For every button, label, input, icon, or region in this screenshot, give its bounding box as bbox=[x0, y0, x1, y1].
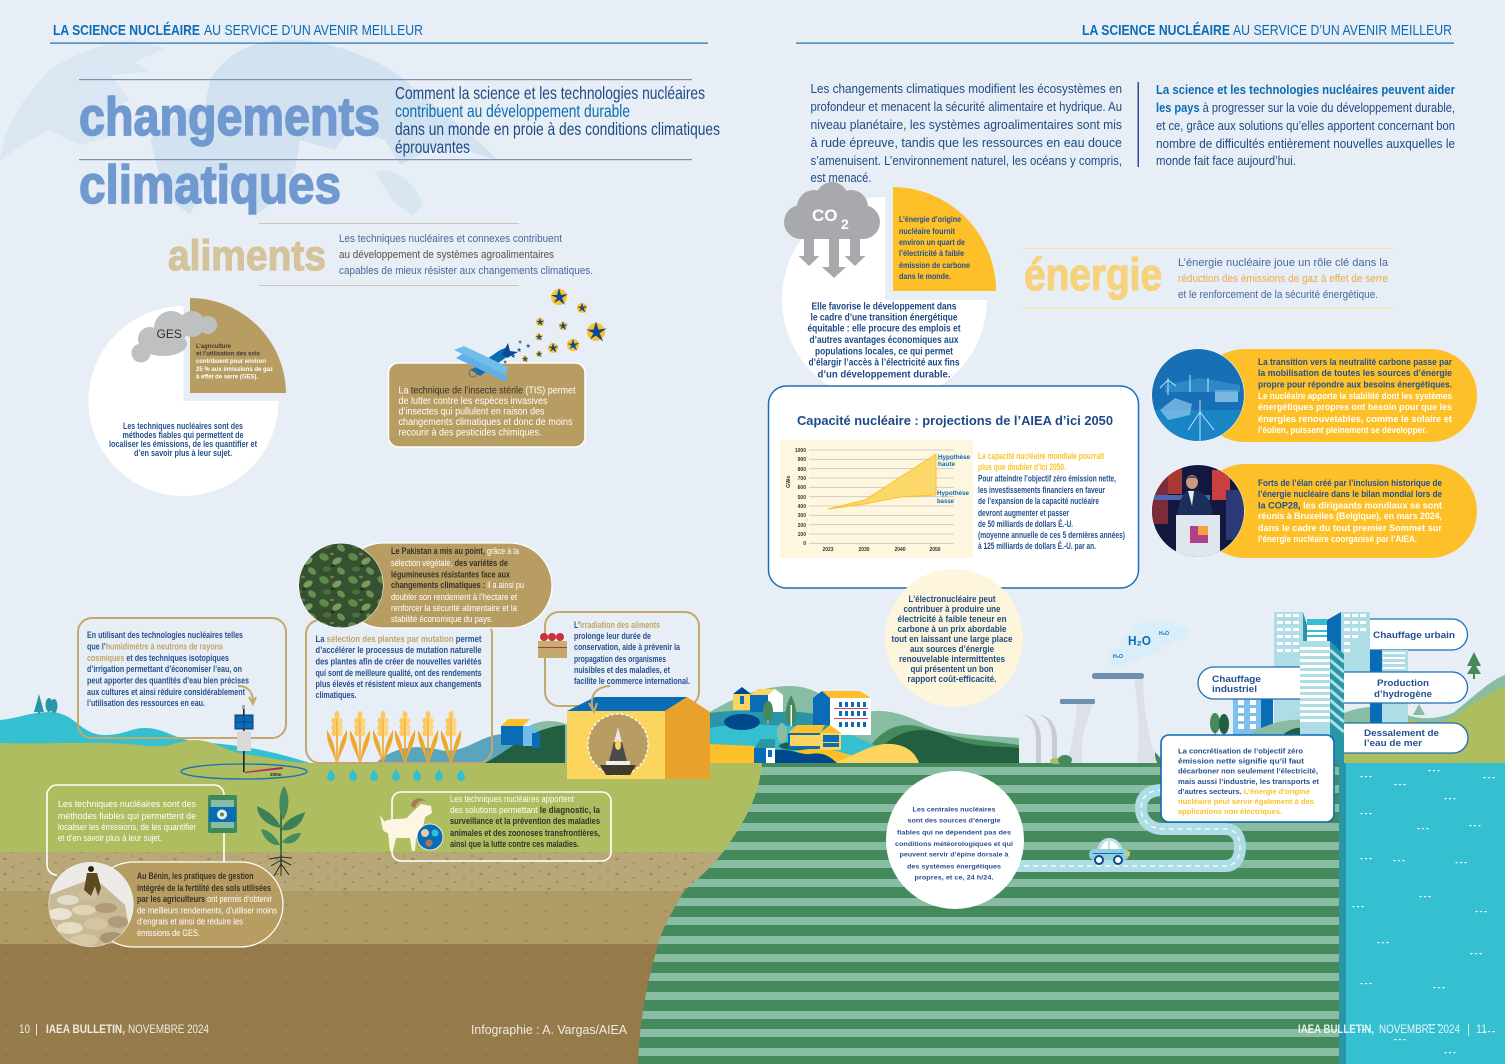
subtitle: contribuent au développement durable bbox=[395, 101, 630, 121]
panel: localiser les émissions bbox=[47, 785, 237, 875]
title: changements bbox=[79, 87, 380, 147]
icon: plant with roots bbox=[257, 786, 305, 876]
panel: localiser les émissions: Les techniques nucléaires sont des bbox=[58, 799, 196, 810]
callout: cream circle: électricité à faible teneur en bbox=[898, 614, 1007, 625]
icon: small teal-roofed house bbox=[754, 739, 775, 763]
callout: cream circle: L’électronucléaire peut bbox=[908, 594, 996, 605]
callout: cream circle: carbone à un prix abordable bbox=[898, 624, 1006, 635]
panel: CO2 pie: le cadre d’une transition énergétique bbox=[810, 312, 958, 324]
panel: Bénin: de meilleurs rendements, d’utiliser moins bbox=[137, 906, 277, 916]
icon: water vapour cloud: H₂O bbox=[1128, 634, 1151, 648]
icon: water drops bbox=[327, 769, 465, 781]
callout: cream circle: contribuer à produire une bbox=[904, 604, 1000, 615]
section heading: énergie: énergie bbox=[1024, 249, 1162, 300]
panel: GES pie: GES bbox=[156, 327, 182, 341]
panel: COP28 pill bbox=[1150, 464, 1477, 559]
label: Production d'hydrogène: d’hydrogène bbox=[1374, 689, 1432, 700]
panel: CO2 pie: Elle favorise le développement dans bbox=[812, 302, 957, 312]
panel: COP28 pill: dans le cadre du tout premier Sommet sur bbox=[1258, 523, 1442, 534]
panel: neutron humidity sensor text: aux cultures et ainsi réduire considérablement bbox=[87, 687, 246, 698]
icon: pine tree bbox=[1413, 652, 1481, 715]
panel: capacity chart card: les investissements financiers en faveur bbox=[978, 485, 1105, 495]
panel: GES pie: contribuent pour environ bbox=[196, 358, 266, 365]
footer right: 11 bbox=[1476, 1024, 1487, 1036]
panel: capacity chart card: plus que doubler d’ici 2050. bbox=[978, 462, 1066, 472]
panel: zoonoses: surveillance et la prévention des maladies bbox=[450, 816, 600, 827]
icon: large white building bbox=[813, 691, 871, 735]
icon: house blue white bbox=[750, 689, 783, 712]
title: climatiques bbox=[79, 155, 341, 215]
panel: food irradiation: facilite le commerce international. bbox=[574, 676, 690, 687]
icon: wheat bbox=[327, 711, 461, 763]
callout: cream circle bbox=[885, 569, 1023, 707]
page header left: AU SERVICE D’UN AVENIR MEILLEUR bbox=[204, 23, 423, 39]
panel: plant mutation: La sélection des plantes par mutation permet bbox=[316, 634, 482, 645]
page header left: LA SCIENCE NUCLÉAIRE bbox=[53, 22, 200, 39]
waves bbox=[1352, 770, 1495, 1054]
panel: Pakistan: changements climatiques : il a ainsi pu bbox=[391, 580, 524, 591]
callout: cream circle: aux sources d’énergie bbox=[910, 644, 994, 655]
line chart: 900 bbox=[798, 457, 806, 463]
line chart: 2050 bbox=[929, 547, 941, 553]
panel: capacity chart card: devront augmenter et passer bbox=[978, 508, 1069, 518]
panel: Bénin: d’engrais et ainsi de réduire les bbox=[137, 916, 243, 928]
line chart: 400 bbox=[798, 504, 806, 510]
panel: neutron humidity sensor text: cosmiques et des techniques isotopiques bbox=[87, 653, 229, 664]
panel: plant mutation bbox=[306, 620, 492, 763]
panel: net zero box: nucléaire peut servir également à des bbox=[1178, 799, 1314, 806]
line chart: 2040 bbox=[894, 547, 906, 553]
panel: neutralité carbone pill: énergies renouvelables, comme le solaire et bbox=[1258, 414, 1453, 425]
line chart: 300 bbox=[798, 513, 806, 519]
subtitle: dans un monde en proie à des conditions climatiques bbox=[395, 119, 720, 139]
line chart: 700 bbox=[798, 476, 806, 482]
striped energy field bbox=[600, 752, 1341, 1064]
label: Chauffage industriel: industriel bbox=[1212, 684, 1257, 695]
panel: CO2 pie: environ un quart de bbox=[899, 237, 965, 247]
panel: net zero box: d’autres secteurs. L’énergie d’origine bbox=[1178, 789, 1310, 796]
paragraph: nuclear science helps: et ce, grâce aux solutions qu’elles apportent concernant bon bbox=[1156, 119, 1455, 133]
photo: legume plants bbox=[298, 543, 384, 628]
panel: COP28 pill: Forts de l’élan créé par l’inclusion historique de bbox=[1258, 478, 1442, 489]
panel: Bénin: émissions de GES. bbox=[137, 928, 200, 939]
section heading: aliments bbox=[168, 223, 593, 286]
callout: cream circle: tout en laissant une large place bbox=[892, 634, 1012, 645]
panel: zoonoses: ainsi que la lutte contre ces maladies. bbox=[450, 839, 579, 850]
line chart: 1000 bbox=[795, 448, 806, 454]
panel: neutron humidity sensor text: En utilisant des technologies nucléaires telles bbox=[87, 630, 243, 641]
section heading: aliments: Les techniques nucléaires et connexes contribuent bbox=[339, 233, 562, 245]
panel: Bénin: par les agriculteurs ont permis d’obtenir bbox=[137, 894, 272, 905]
last line of climate paragraph: est menacé. bbox=[810, 171, 872, 185]
line chart: 800 bbox=[798, 467, 806, 473]
paragraph: nuclear science helps: La science et les technologies nucléaires peuvent aider bbox=[1156, 83, 1455, 97]
panel: Pakistan: sélection végétale, des variétés de bbox=[391, 558, 508, 569]
panel: technique de l'insecte stérile: d’insectes qui pullulent en raison des bbox=[398, 406, 544, 418]
title bbox=[79, 79, 692, 215]
panel: GES pie: méthodes fiables qui permettent de bbox=[122, 430, 244, 440]
paragraph: climate impacts bbox=[810, 82, 1122, 168]
label: Production d'hydrogène: Production bbox=[1377, 678, 1429, 689]
panel: GES pie: d’en savoir plus à leur sujet. bbox=[134, 448, 232, 458]
panel: Pakistan: renforcer la sécurité alimentaire et la bbox=[391, 603, 518, 614]
icon: low yellow building bbox=[788, 725, 841, 750]
icon: goat bbox=[380, 799, 443, 851]
line chart: Hypothèse bbox=[938, 455, 971, 461]
callout: white circle on field: fiables qui ne dépendent pas des bbox=[897, 830, 1011, 836]
panel: technique de l'insecte stérile: de lutter contre les espèces invasives bbox=[398, 395, 548, 407]
globe watermark bbox=[0, 40, 497, 216]
panel: neutron humidity sensor text: l’utilisation des ressources en eau. bbox=[87, 698, 205, 709]
panel: net zero box: La concrétisation de l’objectif zéro bbox=[1178, 748, 1303, 756]
icon: CO2 cloud: 2 bbox=[841, 216, 849, 232]
panel: net zero box bbox=[1161, 735, 1334, 822]
callout: white circle on field: sont des sources d’énergie bbox=[908, 818, 1001, 824]
panel: COP28 pill: réunis à Bruxelles (Belgique), en mars 2024, bbox=[1258, 511, 1442, 522]
footer left: | bbox=[35, 1024, 38, 1036]
icon: car bbox=[1089, 838, 1130, 864]
panel: neutralité carbone pill: Le nucléaire apporte la stabilité dont les systèmes bbox=[1258, 391, 1452, 402]
panel: neutralité carbone pill: propre pour répondre aux besoins énergétiques. bbox=[1258, 380, 1452, 390]
icon: small house bbox=[501, 719, 540, 748]
icon: sterile insects bbox=[503, 288, 607, 364]
paragraph: nuclear science helps: les pays à progresser sur la voie du développement durable, bbox=[1156, 101, 1455, 115]
paragraph: climate impacts: Les changements climatiques modifient les écosystèmes en bbox=[810, 82, 1122, 96]
panel: Pakistan: légumineuses résistantes face aux bbox=[391, 570, 511, 580]
panel: neutralité carbone pill: énergétiques propres ont besoin pour que les bbox=[1258, 402, 1452, 413]
panel: CO2 pie: d’autres avantages économiques aux bbox=[810, 335, 959, 346]
footer right: NOVEMBRE 2024 bbox=[1379, 1024, 1461, 1036]
icon: biplane bbox=[454, 343, 518, 382]
icon: trees bbox=[1210, 713, 1229, 736]
icon: crate of apples bbox=[538, 633, 567, 658]
icon: CO2 cloud bbox=[784, 182, 880, 278]
callout: cream circle: renouvelable intermittentes bbox=[899, 654, 1005, 665]
panel: neutralité carbone pill bbox=[1150, 348, 1477, 442]
hills behind the food side bbox=[0, 694, 620, 770]
icon: teal trees bbox=[34, 694, 58, 714]
section heading: énergie: réduction des émissions de gaz à effet de serre bbox=[1178, 273, 1388, 285]
subtitle: Comment la science et les technologies nucléaires bbox=[395, 83, 705, 103]
panel: localiser les émissions: et d’en savoir plus à leur sujet. bbox=[58, 833, 162, 844]
panel: GES pie: localiser les émissions, de les quantifier et bbox=[109, 439, 257, 449]
paragraph: nuclear science helps: nombre de difficultés entièrement nouvelles auxquelles le bbox=[1156, 137, 1455, 151]
callout: cream circle: qui présentent un bon bbox=[910, 664, 994, 675]
icon: neutron sensor: 200m bbox=[270, 772, 282, 777]
panel: COP28 pill: l’énergie nucléaire coorganisé par l’AIEA. bbox=[1258, 534, 1417, 545]
panel: technique de l'insecte stérile: recourir à des pesticides chimiques. bbox=[398, 426, 542, 438]
panel: zoonoses: Les techniques nucléaires apportent bbox=[450, 794, 574, 805]
panel: GES pie: 25 % aux émissions de gaz bbox=[196, 366, 274, 373]
section heading: énergie: L’énergie nucléaire joue un rôle clé dans la bbox=[1178, 257, 1389, 269]
icon: house yellow bbox=[733, 687, 751, 710]
ground layers bbox=[0, 735, 770, 1064]
label: Chauffage urbain: Chauffage urbain bbox=[1373, 630, 1455, 641]
panel: technique de l'insecte stérile: changements climatiques et donc de moins bbox=[398, 416, 572, 428]
panel: technique de l'insecte stérile: La technique de l’insecte stérile (TIS) permet bbox=[398, 384, 576, 396]
panel: net zero box: applications non électriques. bbox=[1178, 809, 1282, 816]
paragraph: nuclear science helps bbox=[1156, 83, 1455, 168]
panel: capacity chart card: Pour atteindre l’objectif zéro émission nette, bbox=[978, 474, 1116, 484]
energy side village and hills bbox=[709, 686, 1019, 763]
icon: trees bbox=[763, 695, 796, 743]
subtitle: éprouvantes bbox=[395, 137, 470, 157]
line chart: 100 bbox=[798, 532, 806, 538]
panel: plant mutation: plus élevés et résistent mieux aux changements bbox=[316, 679, 482, 690]
arrow: to sensor bbox=[238, 686, 256, 704]
paragraph: climate impacts: s’amenuisent. L’environnement naturel, les océans y compris, bbox=[810, 154, 1122, 168]
panel: localiser les émissions: localiser les émissions, de les quantifier bbox=[58, 822, 196, 833]
panel: CO2 pie: d’élargir l’accès à l’électricité aux fins bbox=[808, 358, 960, 368]
panel: CO2 pie: émission de carbone bbox=[899, 260, 970, 270]
page header right: AU SERVICE D’UN AVENIR MEILLEUR bbox=[1233, 23, 1452, 39]
panel: GES pie: L’agriculture bbox=[196, 343, 231, 350]
line chart: haute bbox=[938, 462, 956, 468]
panel: GES pie bbox=[89, 298, 286, 496]
label: Dessalement de l'eau de mer: Dessalement de bbox=[1364, 728, 1439, 739]
page header right: LA SCIENCE NUCLÉAIRE bbox=[1082, 22, 1230, 39]
panel: CO2 pie: l’électricité à faible bbox=[899, 248, 964, 258]
panel: net zero box: décarboner non seulement l’électricité, bbox=[1178, 768, 1318, 776]
road bbox=[1015, 790, 1240, 866]
callout: white circle on field: propres, et ce, 24 h/24. bbox=[914, 874, 994, 882]
panel: COP28 pill: l’énergie nucléaire dans le bilan mondial lors de bbox=[1258, 489, 1442, 500]
section heading: énergie: et le renforcement de la sécurité énergétique. bbox=[1178, 289, 1378, 301]
line chart bbox=[780, 440, 973, 558]
panel: CO2 pie: dans le monde. bbox=[899, 271, 951, 281]
panel: Pakistan: Le Pakistan a mis au point, grâce à la bbox=[391, 546, 520, 557]
panel: Bénin: intégrée de la fertilité des sols utilisées bbox=[137, 883, 271, 894]
panel: food irradiation: prolonge leur durée de bbox=[574, 631, 651, 642]
icon: neutron sensor bbox=[181, 705, 307, 779]
panel: Pakistan bbox=[298, 543, 552, 628]
panel: net zero box: émission nette signifie qu’il faut bbox=[1178, 758, 1305, 766]
icon: GES cloud bbox=[132, 311, 217, 362]
line chart: 500 bbox=[798, 495, 806, 501]
panel: Bénin bbox=[48, 862, 283, 950]
label: Chauffage urbain bbox=[1360, 619, 1467, 650]
line chart: 600 bbox=[798, 485, 806, 491]
icon: fertilizer bag bbox=[208, 795, 237, 833]
panel: CO2 pie bbox=[782, 182, 996, 402]
footer left: NOVEMBRE 2024 bbox=[128, 1024, 210, 1036]
panel: food irradiation: nuisibles et des maladies, et bbox=[574, 665, 671, 676]
arrow: to warehouse bbox=[589, 686, 610, 712]
panel: GES pie: à effet de serre (GES). bbox=[196, 374, 258, 380]
label: Dessalement de l'eau de mer: l’eau de mer bbox=[1364, 738, 1422, 749]
panel: capacity chart card: La capacité nucléaire mondiale pourrait bbox=[978, 451, 1104, 461]
panel: CO2 pie: d’un développement durable. bbox=[818, 370, 951, 380]
paragraph: climate impacts: niveau planétaire, les systèmes agroalimentaires sont mis bbox=[810, 118, 1122, 132]
line chart: GWe bbox=[786, 476, 792, 488]
panel: plant mutation: d’accélérer le processus de mutation naturelle bbox=[316, 645, 482, 656]
panel: CO2 pie: populations locales, ce qui permet bbox=[815, 346, 954, 358]
panel: neutron humidity sensor text bbox=[78, 618, 286, 738]
photo: farmer on sacks bbox=[48, 862, 134, 950]
panel: technique de l'insecte stérile bbox=[388, 363, 585, 447]
panel: capacity chart card: à 125 milliards de dollars É.-U. par an. bbox=[978, 540, 1096, 551]
footer left bbox=[19, 1024, 210, 1036]
panel: neutralité carbone pill: la mobilisation de toutes les sources d’énergie bbox=[1258, 368, 1452, 379]
paragraph: climate impacts: profondeur et menacent la sécurité alimentaire et hydrique. Au bbox=[810, 100, 1122, 114]
panel: zoonoses: des solutions permettant le diagnostic, la bbox=[450, 805, 601, 816]
icon: water vapour cloud: H₂O bbox=[1113, 654, 1124, 660]
panel: CO2 pie: nucléaire fournit bbox=[899, 226, 955, 236]
label: Dessalement de l'eau de mer bbox=[1344, 723, 1468, 753]
label: Production d'hydrogène bbox=[1344, 672, 1467, 703]
section heading: aliments: capables de mieux résister aux changements climatiques. bbox=[339, 265, 593, 277]
line chart: basse bbox=[937, 499, 955, 505]
panel: Bénin: Au Bénin, les pratiques de gestion bbox=[137, 871, 254, 882]
icon: water vapour cloud bbox=[1108, 620, 1189, 668]
panel: neutron humidity sensor text: que l’humidimètre à neutrons de rayons bbox=[87, 642, 223, 652]
panel: plant mutation: qui sont de meilleure qualité, ont des rendements bbox=[316, 668, 482, 679]
line chart: 2023 bbox=[822, 547, 834, 553]
footer left: 10 bbox=[19, 1024, 30, 1036]
panel: capacity chart card: (moyenne annuelle de ces 5 dernières années) bbox=[978, 530, 1125, 540]
panel: plant mutation: climatiques. bbox=[316, 690, 356, 701]
panel: Pakistan: stabilité économique du pays. bbox=[391, 614, 493, 625]
panel: food irradiation bbox=[538, 612, 699, 706]
panel: capacity chart card bbox=[768, 386, 1138, 588]
panel: neutralité carbone pill: La transition vers la neutralité carbone passe par bbox=[1258, 357, 1452, 368]
divider bbox=[1138, 82, 1139, 167]
line chart: 200 bbox=[798, 523, 806, 529]
callout: white circle on field: des systèmes énergétiques bbox=[907, 864, 1001, 870]
callout: white circle on field: conditions météorologiques et qui bbox=[895, 841, 1013, 848]
section heading: énergie bbox=[1022, 248, 1395, 309]
cooling towers bbox=[1022, 673, 1157, 765]
panel: neutralité carbone pill: l’éolien, puissent pleinement se développer. bbox=[1258, 425, 1427, 436]
panel: zoonoses bbox=[380, 792, 611, 861]
line chart: 0 bbox=[803, 541, 806, 547]
paragraph: climate impacts: à rude épreuve, tandis que les ressources en eau douce bbox=[810, 136, 1122, 150]
line chart: Hypothèse bbox=[937, 491, 970, 497]
page header left bbox=[50, 22, 708, 44]
footer left: IAEA BULLETIN, bbox=[46, 1024, 125, 1036]
page header right bbox=[796, 22, 1454, 44]
panel: GES pie: Les techniques nucléaires sont des bbox=[123, 421, 243, 431]
credit: Infographie : A. Vargas/AIEA bbox=[471, 1022, 627, 1037]
panel: plant mutation: des plantes afin de créer de nouvelles variétés bbox=[316, 656, 482, 668]
panel: CO2 pie: équitable : elle procure des emplois et bbox=[808, 324, 961, 334]
city buildings bbox=[1210, 612, 1481, 763]
section heading: aliments: aliments bbox=[168, 232, 326, 280]
panel: neutron humidity sensor text: peut apporter des quantités d’eau bien précises bbox=[87, 676, 249, 686]
footer right: IAEA BULLETIN, bbox=[1298, 1024, 1374, 1036]
icon: water vapour cloud: H₂O bbox=[1159, 631, 1170, 637]
label: Chauffage industriel bbox=[1198, 667, 1300, 699]
photo: speaker at lectern bbox=[1150, 464, 1246, 559]
paragraph: nuclear science helps: monde fait face aujourd’hui. bbox=[1156, 154, 1296, 168]
label: Chauffage industriel: Chauffage bbox=[1212, 674, 1261, 685]
icon: CO2 cloud: CO bbox=[812, 206, 838, 225]
section heading: aliments: au développement de systèmes agroalimentaires bbox=[339, 249, 554, 261]
panel: neutron humidity sensor text: d’irrigation permettant d’économiser l’eau, on bbox=[87, 664, 242, 675]
photo: digital wind farm bbox=[1150, 348, 1246, 442]
callout: white circle on field bbox=[886, 771, 1024, 909]
subtitle bbox=[395, 83, 720, 157]
callout: white circle on field: Les centrales nucléaires bbox=[912, 806, 996, 814]
icon: irradiation warehouse bbox=[567, 686, 710, 779]
panel: COP28 pill: la COP28, les dirigeants mondiaux se sont bbox=[1258, 500, 1443, 512]
sea and coast bbox=[1339, 675, 1505, 1064]
panel: food irradiation: propagation des organismes bbox=[574, 654, 666, 665]
panel: GES pie: et l’utilisation des sols bbox=[196, 350, 260, 358]
panel: capacity chart card: de 50 milliards de dollars É.-U. bbox=[978, 518, 1073, 529]
footer right: | bbox=[1467, 1024, 1470, 1036]
panel: CO2 pie: L’énergie d’origine bbox=[899, 214, 961, 224]
panel: capacity chart card: de l’expansion de la capacité nucléaire bbox=[978, 496, 1099, 506]
panel: localiser les émissions: méthodes fiables qui permettent de bbox=[58, 811, 196, 822]
callout: cream circle: rapport coût-efficacité. bbox=[908, 674, 996, 685]
panel: Pakistan: doubler son rendement à l’hectare et bbox=[391, 592, 517, 603]
line chart: 2030 bbox=[858, 547, 870, 553]
panel: food irradiation: conservation, aide à prévenir la bbox=[574, 642, 681, 653]
callout: white circle on field: peuvent servir d’épine dorsale à bbox=[900, 852, 1009, 858]
panel: net zero box: mais aussi l’industrie, les transports et bbox=[1178, 779, 1320, 786]
panel: zoonoses: animales et des zoonoses transfrontières, bbox=[450, 828, 600, 839]
panel: food irradiation: L’irradiation des aliments bbox=[574, 620, 660, 631]
panel: capacity chart card: Capacité nucléaire : projections de l’AIEA d’ici 2050 bbox=[797, 413, 1113, 428]
footer right bbox=[1298, 1024, 1487, 1036]
